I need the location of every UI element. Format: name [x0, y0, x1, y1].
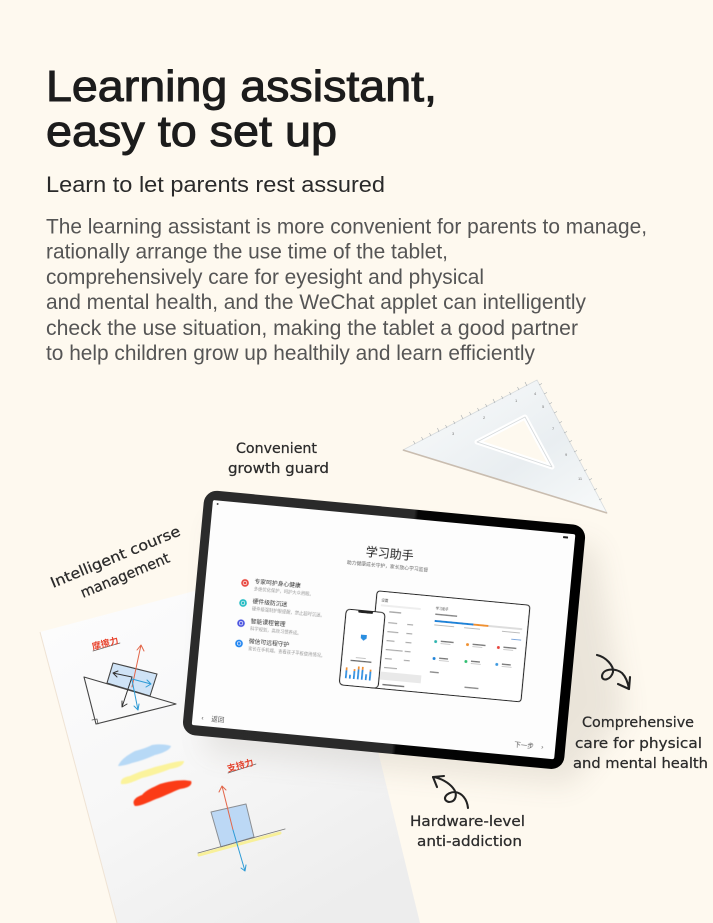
handwritten label: comprehensive care: care for physical: [575, 736, 702, 752]
body text: rationally arrange the use time of the tablet,: [46, 240, 448, 264]
screen heading: 助力健康成长守护，家长放心学习监督: [347, 559, 429, 574]
back button: ‹: [201, 715, 204, 722]
status bar icons: [217, 503, 568, 539]
icon: set square ruler: 7: [552, 426, 555, 431]
handwritten label: hardware-level anti-addiction: Hardware-level: [410, 814, 525, 830]
feature 1: [240, 576, 315, 598]
feature 2: 硬件级防沉迷: [252, 597, 288, 608]
paint swatches: [118, 744, 191, 806]
feature 4: [235, 636, 326, 659]
body text: check the use situation, making the tablet a good partner: [46, 316, 578, 340]
feature 3: 智能课程管理: [250, 617, 286, 628]
feature list: [235, 576, 332, 659]
handwritten label: intelligent course management: Intelligent course: [48, 524, 183, 592]
body text: and mental health, and the WeChat applet can intelligently: [46, 290, 586, 314]
subtitle: Learn to let parents rest assured: [46, 172, 385, 197]
handwritten label: intelligent course management: management: [78, 550, 173, 602]
handwritten label: comprehensive care: Comprehensive: [582, 715, 694, 731]
mini tablet mockup: [368, 591, 530, 702]
handwritten label: comprehensive care: and mental health: [573, 756, 708, 772]
icon: set square ruler: 2: [483, 415, 486, 420]
sketch: block on flat surface: [198, 764, 285, 871]
feature 4: 微信可远程守护: [249, 637, 290, 649]
back button: [201, 714, 225, 724]
sketch label: friction: 摩擦力: [91, 634, 120, 652]
handwritten label: comprehensive care: [573, 715, 708, 772]
handwritten label: hardware-level anti-addiction: anti-addiction: [417, 834, 522, 850]
icon: set square ruler: 1: [515, 398, 518, 403]
icon: set square ruler: 5: [542, 404, 545, 409]
tablet shadow: [205, 520, 625, 785]
handwritten label: convenient growth guard: [228, 441, 329, 477]
tablet: [182, 490, 586, 770]
screen heading: 学习助手: [365, 544, 414, 563]
feature 1: 多维优化保护，呵护大众用眼。: [254, 585, 314, 598]
next button: [514, 740, 544, 751]
next button: 下一步: [514, 740, 535, 750]
title: [46, 62, 437, 156]
arrow: curly arrow pointing to tablet lower right: [597, 655, 630, 689]
body text: to help children grow up healthily and learn efficiently: [46, 341, 535, 365]
body text: The learning assistant is more convenient for parents to manage,: [46, 214, 647, 238]
mini tablet mockup: 学习助手: [436, 605, 450, 612]
panel: paper with physics sketches: [40, 555, 420, 923]
phone mockup: [339, 609, 385, 688]
handwritten label: hardware-level anti-addiction: [410, 814, 525, 850]
body text: [46, 214, 647, 365]
feature 3: 科学规划，高效习惯养成。: [250, 625, 302, 637]
mini tablet mockup: 设置: [381, 597, 389, 603]
arrow: curly arrow pointing up to tablet: [433, 776, 468, 808]
handwritten label: convenient growth guard: Convenient: [236, 441, 317, 457]
icon: set square ruler: 11: [578, 476, 583, 481]
sketch label: support force: 支持力: [226, 756, 255, 774]
icon: set square ruler: [403, 380, 607, 513]
title: easy to set up: [46, 107, 337, 156]
next button: ›: [541, 744, 544, 751]
icon: set square ruler: 4: [534, 391, 537, 396]
feature 4: 家长在手机端，查看孩子平板使用情况。: [248, 645, 326, 659]
sketch: incline with block: [84, 643, 176, 724]
feature 1: 专家呵护身心健康: [254, 577, 301, 590]
handwritten label: convenient growth guard: growth guard: [228, 461, 329, 477]
icon: set square ruler: 3: [452, 431, 455, 436]
screen heading: [347, 542, 430, 574]
mini tablet cards: [429, 640, 516, 692]
icon: set square ruler: 9: [565, 452, 568, 457]
feature 2: [238, 596, 326, 619]
title: Learning assistant,: [46, 62, 437, 111]
body text: comprehensively care for eyesight and physical: [46, 265, 484, 289]
feature 2: 硬件级强制护眼提醒，禁止超时沉迷。: [252, 605, 325, 619]
back button: 返回: [211, 715, 225, 724]
feature 3: [236, 616, 302, 637]
tablet screen: [192, 500, 575, 759]
